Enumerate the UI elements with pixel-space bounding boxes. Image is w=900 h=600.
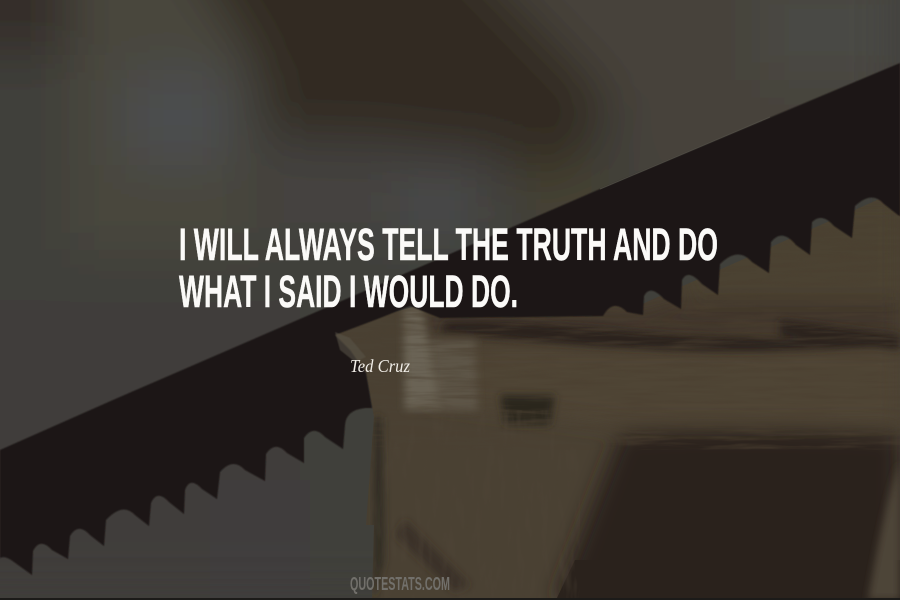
stump base shadow xyxy=(556,560,900,600)
quote text xyxy=(179,219,718,317)
wood fragments on saw xyxy=(335,332,366,362)
quote line 2: WHAT I SAID I WOULD DO. xyxy=(179,266,518,317)
author signature: Ted Cruz xyxy=(350,356,410,376)
wood stump xyxy=(330,190,900,600)
watermark: QUOTESTATS.COM xyxy=(350,574,450,594)
saw top edge highlight xyxy=(600,117,770,189)
